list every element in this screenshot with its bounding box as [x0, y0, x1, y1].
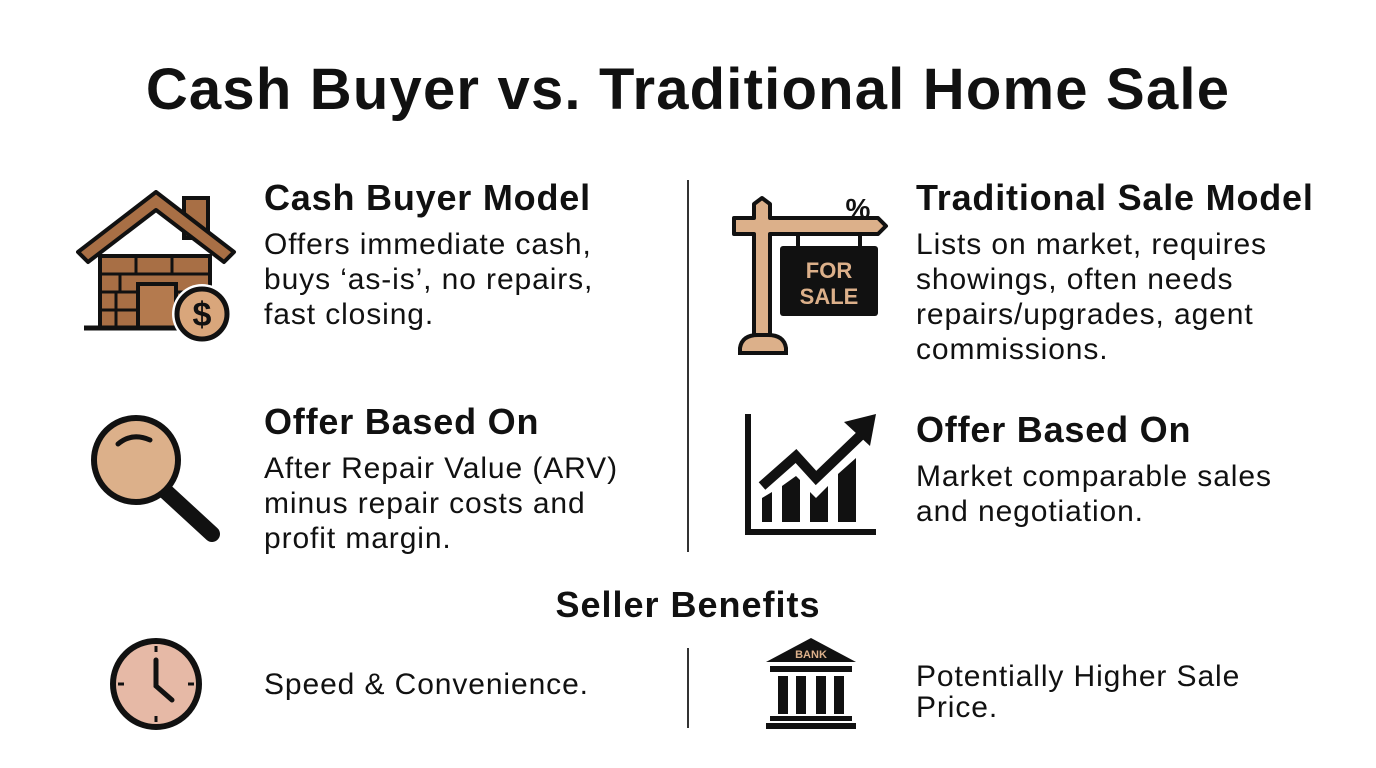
icon: for sale sign: % [846, 193, 871, 224]
text: offer based on (cash): Offer Based On [264, 401, 539, 442]
text: cash buyer model [264, 177, 593, 331]
text: traditional sale model: repairs/upgrades, agent [916, 298, 1254, 331]
text: traditional sale model: Traditional Sale Model [916, 177, 1314, 218]
text: offer based on (traditional): and negotiation. [916, 495, 1144, 528]
icon: brick house with dollar [76, 190, 236, 342]
text: cash buyer model: buys ‘as-is’, no repairs, [264, 263, 593, 296]
text: higher price [916, 660, 1240, 724]
icon: clock [110, 638, 202, 730]
text: traditional sale model: commissions. [916, 333, 1108, 366]
icon: for sale sign [732, 193, 888, 355]
text: higher price: Price. [916, 691, 998, 724]
icon: for sale sign: FOR [806, 258, 852, 283]
text: offer based on (traditional) [916, 409, 1272, 528]
text: offer based on (traditional): Offer Based On [916, 409, 1191, 450]
text: traditional sale model: Lists on market, requires [916, 228, 1267, 261]
text: cash buyer model: Cash Buyer Model [264, 177, 591, 218]
divider [687, 180, 689, 552]
icon: bank [766, 638, 856, 729]
heading: seller benefits: Seller Benefits [555, 584, 821, 625]
text: offer based on (traditional): Market comparable sales [916, 460, 1272, 493]
icon: growth chart [745, 414, 876, 535]
text: traditional sale model: showings, often needs [916, 263, 1233, 296]
title: Cash Buyer vs. Traditional Home Sale [146, 57, 1230, 122]
icon: brick house with dollar: $ [193, 296, 212, 334]
text: offer based on (cash) [264, 401, 618, 555]
text: speed: Speed & Convenience. [264, 668, 589, 701]
icon: for sale sign: SALE [800, 284, 858, 309]
text: offer based on (cash): minus repair costs and [264, 487, 586, 520]
text: higher price: Potentially Higher Sale [916, 660, 1240, 693]
icon: magnifying glass [91, 415, 220, 542]
text: cash buyer model: fast closing. [264, 298, 434, 331]
text: traditional sale model [916, 177, 1314, 366]
text: cash buyer model: Offers immediate cash, [264, 228, 592, 261]
icon: bank: BANK [795, 649, 827, 661]
text: offer based on (cash): After Repair Value (ARV) [264, 452, 618, 485]
text: offer based on (cash): profit margin. [264, 522, 452, 555]
